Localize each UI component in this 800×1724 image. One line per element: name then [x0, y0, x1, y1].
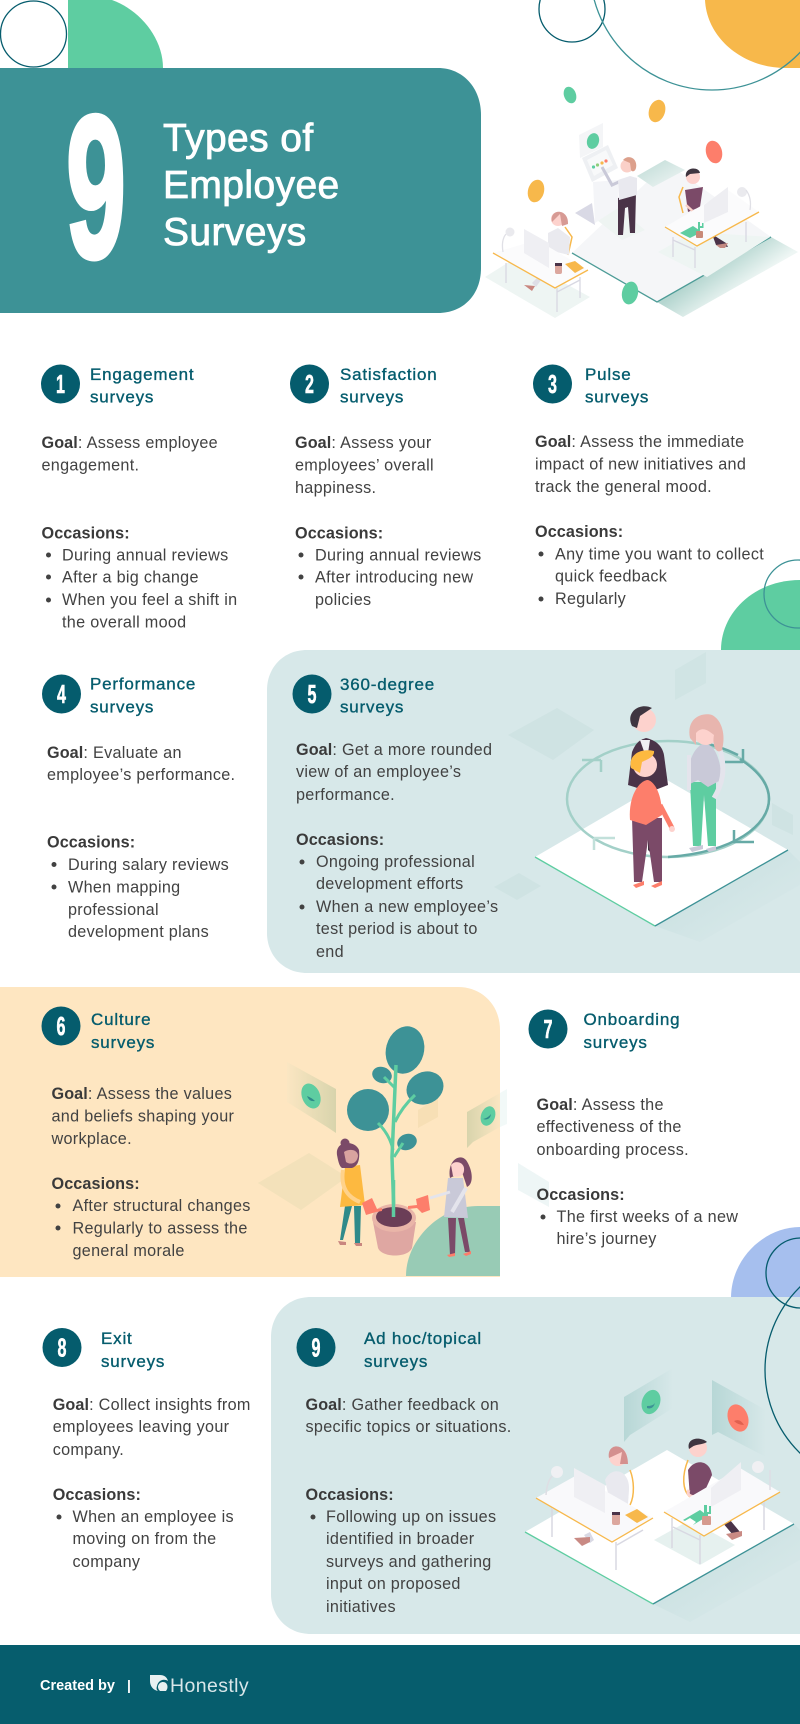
panel: card 9 ad hoc topical surveys: Ad hoc/topical [364, 1329, 482, 1348]
panel: card 7 onboarding surveys: : Assess the [573, 1096, 664, 1114]
panel: card 2 satisfaction surveys: 2 [305, 369, 314, 399]
panel: card 8 exit surveys [42, 1328, 251, 1571]
panel: card 3 pulse surveys: Regularly [555, 590, 627, 608]
man in suit [628, 706, 668, 858]
panel: card 7 onboarding surveys: Onboarding [584, 1010, 680, 1029]
icon: Honestly logo mark [150, 1675, 168, 1691]
created by credit: Created by [40, 1678, 115, 1694]
panel: card 8 exit surveys: When an employee is [72, 1508, 234, 1526]
panel: card 5 360-degree surveys: performance. [296, 786, 395, 804]
panel: card 6 culture surveys: surveys [91, 1033, 155, 1052]
panel: card 2 satisfaction surveys: employees’ overall [295, 456, 434, 474]
panel: card 8 exit surveys: moving on from the [72, 1530, 216, 1548]
circular arrows [567, 741, 769, 857]
panel: card 9 ad hoc topical surveys: specific topics or situations. [306, 1418, 512, 1436]
panel: card 1 engagement surveys: surveys [90, 388, 154, 406]
panel: card 2 satisfaction surveys: happiness. [295, 479, 376, 497]
illustration: two desk workers with feedback bubbles [525, 1368, 800, 1622]
person with orange hair [630, 750, 675, 888]
panel: card 7 onboarding surveys: effectiveness of the [536, 1118, 682, 1136]
panel: card 3 pulse surveys: impact of new initiatives and [535, 456, 746, 474]
panel: card 5 360-degree surveys: 360-degree [340, 675, 435, 694]
decoration: large dark circle bottom right [765, 1254, 800, 1486]
panel: card 2 satisfaction surveys: Occasions: [295, 524, 383, 542]
panel: card 4 performance surveys: 4 [57, 679, 66, 709]
panel: card 3 pulse surveys: 3 [548, 369, 557, 399]
panel: card 9 ad hoc topical surveys: initiatives [326, 1598, 396, 1616]
decoration: pale strip at top of card seven [500, 1089, 507, 1127]
girl with yellow top [337, 1138, 382, 1246]
illustration: plant and two people watering [258, 1022, 500, 1257]
plant [347, 1022, 449, 1256]
panel: card 3 pulse surveys: : Assess the immediate [571, 433, 744, 451]
panel: card 5 360-degree surveys: view of an employee’s [296, 763, 461, 781]
decoration: pale panel behind card seven [518, 1163, 549, 1207]
green speech panel [624, 1368, 673, 1442]
left worker at desk [493, 212, 588, 312]
panel: card 1 engagement surveys: Occasions: [42, 524, 130, 542]
illustration: office workers and feedback icons [485, 85, 798, 318]
panel: card 6 culture surveys: workplace. [50, 1130, 132, 1148]
right worker at desk [665, 168, 759, 268]
pot [373, 1222, 416, 1256]
decoration: top left circle outline [0, 1, 66, 67]
panel: card 1 engagement surveys: : Assess employee [78, 434, 218, 452]
panel: card 5 360-degree surveys: Ongoing professional [316, 853, 475, 871]
panel: card 5 360-degree surveys: test period is about to [316, 920, 478, 938]
floating icons [525, 85, 725, 306]
panel: card 7 onboarding surveys: The first weeks of a new [556, 1208, 738, 1226]
panel: card 2 satisfaction surveys: After introducing new [315, 568, 473, 586]
panel: card 5 360-degree surveys: Occasions: [296, 831, 384, 849]
decoration: dark circle over blue shape [766, 1238, 800, 1308]
panel: card 4 performance surveys: Occasions: [47, 834, 135, 852]
panel: card 9 ad hoc topical surveys [271, 1297, 800, 1634]
panel: card 8 exit surveys: : Collect insights from [89, 1396, 251, 1414]
panel: card 3 pulse surveys: Occasions: [535, 523, 623, 541]
panel: card 3 pulse surveys: surveys [585, 388, 649, 406]
panel: card 9 ad hoc topical surveys: Goal [306, 1396, 342, 1414]
panel: card 7 onboarding surveys: surveys [584, 1033, 648, 1052]
panel: card 5 360-degree surveys: development efforts [316, 875, 464, 893]
panel: card 4 performance surveys: : Evaluate an [83, 744, 182, 762]
panel: card 1 engagement surveys: After a big change [62, 568, 199, 586]
panel: card 8 exit surveys: company. [53, 1441, 124, 1459]
panel: card 7 onboarding surveys [528, 1010, 738, 1248]
panel: card 8 exit surveys: Goal [53, 1396, 89, 1414]
panel: card 1 engagement surveys: During annual reviews [62, 546, 228, 564]
panel: card 1 engagement surveys: Engagement [90, 365, 194, 384]
panel: card 8 exit surveys: Exit [101, 1329, 133, 1348]
panel: card 6 culture surveys: After structural changes [72, 1197, 251, 1215]
panel: card 9 ad hoc topical surveys: identified in broader [326, 1530, 475, 1548]
panel: card 5 360-degree surveys: : Get a more rounded [332, 741, 492, 759]
panel: card 8 exit surveys: Occasions: [53, 1486, 141, 1504]
panel: card 6 culture surveys: general morale [72, 1242, 185, 1260]
panel: card 4 performance surveys: When mapping [68, 878, 180, 896]
panel: card 9 ad hoc topical surveys: : Gather feedback on [342, 1396, 499, 1414]
decoration: teal circle outline beside card three [764, 560, 800, 628]
panel: card 4 performance surveys: employee’s performance. [47, 766, 235, 784]
panel: card 1 engagement surveys: Goal [42, 434, 78, 452]
panel: card 3 pulse surveys: Pulse [585, 365, 632, 384]
big number nine: 9 [66, 75, 126, 301]
panel: card 1 engagement surveys [41, 364, 237, 632]
kiosk [575, 123, 618, 225]
panel: card 2 satisfaction surveys [290, 364, 481, 609]
separator: | [127, 1677, 131, 1693]
panel: card 1 engagement surveys: the overall mood [62, 614, 186, 632]
panel: card 8 exit surveys: company [72, 1553, 141, 1571]
decoration: top right orange shape [705, 0, 800, 68]
panel: card 9 ad hoc topical surveys: surveys [364, 1352, 428, 1371]
panel: card 5 360-degree surveys: end [316, 943, 344, 961]
Honestly wordmark: Honestly [170, 1675, 249, 1697]
panel: card 3 pulse surveys: Goal [535, 433, 571, 451]
panel: card 5 360-degree surveys: surveys [340, 698, 404, 717]
panel: card 9 ad hoc topical surveys: 9 [312, 1332, 320, 1363]
panel: card 2 satisfaction surveys: Goal [295, 434, 331, 452]
panel: card 4 performance surveys: Performance [90, 674, 196, 694]
panel: card 6 culture surveys: Culture [91, 1010, 151, 1029]
panel: card 6 culture surveys: 6 [57, 1011, 65, 1041]
right desk and worker [664, 1439, 780, 1564]
panel: card 6 culture surveys [0, 987, 500, 1277]
panel: card 7 onboarding surveys: Occasions: [536, 1186, 625, 1204]
panel: card 8 exit surveys: employees leaving your [53, 1418, 230, 1436]
panel: card 4 performance surveys: professional [68, 901, 159, 919]
panel: card 7 onboarding surveys: onboarding process. [536, 1141, 689, 1159]
standing man [602, 157, 637, 235]
panel: card 9 ad hoc topical surveys: surveys and gathering [326, 1553, 492, 1571]
panel: card 3 pulse surveys: track the general mood. [535, 478, 712, 496]
panel: card 6 culture surveys: : Assess the values [88, 1085, 232, 1103]
panel: card 8 exit surveys: surveys [101, 1352, 165, 1371]
panel: card 4 performance surveys [42, 674, 235, 941]
title: Employee [163, 164, 340, 207]
panel: card 1 engagement surveys: engagement. [42, 456, 139, 474]
woman in grey and green [688, 714, 724, 852]
panel: card 2 satisfaction surveys: Satisfaction [340, 365, 437, 384]
panel: card 4 performance surveys: surveys [90, 698, 154, 716]
panel: card 9 ad hoc topical surveys: input on proposed [326, 1575, 461, 1593]
decoration: green shape beside card three [721, 580, 800, 650]
red speech panel [712, 1380, 766, 1457]
panel: card 6 culture surveys: and beliefs shaping your [52, 1108, 234, 1126]
panel: card 7 onboarding surveys: hire’s journey [556, 1230, 657, 1248]
panel: card 2 satisfaction surveys: policies [315, 591, 371, 609]
decoration: top right large teal circle [590, 0, 800, 90]
panel: card 5 360-degree surveys: 5 [308, 679, 316, 709]
panel: card 5 360-degree surveys: When a new employee’s [316, 898, 498, 916]
panel: card 7 onboarding surveys: Goal [536, 1096, 573, 1114]
panel: card 6 culture surveys: Regularly to assess the [72, 1220, 248, 1238]
panel: card 2 satisfaction surveys: During annual reviews [315, 546, 481, 564]
panel: card 5 360-degree surveys: Goal [296, 741, 332, 759]
panel: card 3 pulse surveys: quick feedback [555, 568, 668, 586]
header banner [0, 68, 481, 313]
title: Types of [163, 117, 314, 160]
panel: card 9 ad hoc topical surveys: Occasions: [306, 1486, 394, 1504]
title: Surveys [163, 211, 307, 254]
panel: card 4 performance surveys: During salary reviews [68, 856, 229, 874]
panel: card 2 satisfaction surveys: surveys [340, 388, 404, 406]
panel: card 1 engagement surveys: 1 [56, 369, 65, 399]
panel: card 4 performance surveys: Goal [47, 744, 83, 762]
decoration: top left green shape [68, 0, 163, 68]
decoration: blue shape bottom right [731, 1227, 800, 1298]
panel: card 6 culture surveys: Occasions: [52, 1175, 140, 1193]
panel: card 1 engagement surveys: When you feel a shift in [62, 591, 237, 609]
panel: card 5 360-degree surveys [267, 650, 800, 973]
left desk and worker [536, 1446, 653, 1570]
footer [0, 1645, 800, 1724]
decoration: top right dark circle [539, 0, 605, 42]
girl with grey top [408, 1157, 472, 1257]
panel: card 3 pulse surveys: Any time you want to collect [555, 546, 764, 564]
panel: card 6 culture surveys: Goal [52, 1085, 88, 1103]
panel: card 2 satisfaction surveys: : Assess your [331, 434, 432, 452]
illustration: colleagues in a feedback circle [494, 652, 800, 942]
panel: card 9 ad hoc topical surveys: Following up on issues [326, 1508, 496, 1526]
panel: card 7 onboarding surveys: 7 [544, 1014, 552, 1044]
panel: card 8 exit surveys: 8 [58, 1332, 66, 1363]
panel: card 3 pulse surveys [533, 364, 764, 608]
panel: card 4 performance surveys: development plans [68, 923, 209, 941]
